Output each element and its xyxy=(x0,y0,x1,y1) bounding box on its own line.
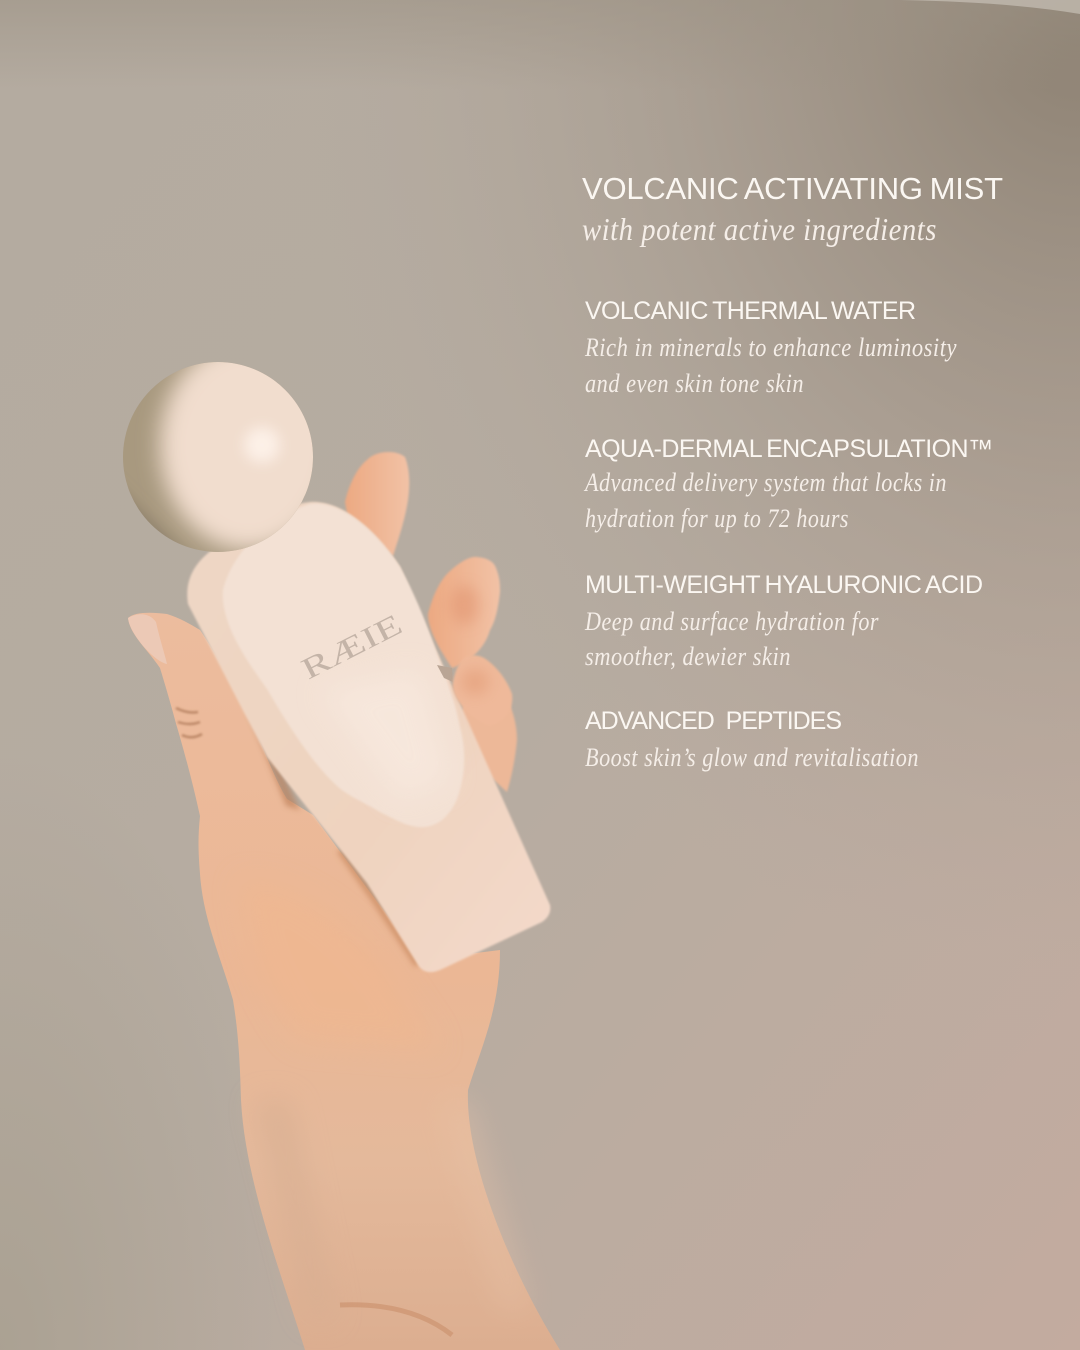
ingredient: volcanic thermal water: VOLCANIC THERMAL WATER xyxy=(585,297,916,325)
ingredient: multi-weight hyaluronic acid xyxy=(584,571,983,671)
ring finger tip xyxy=(453,655,512,726)
bottle neck xyxy=(216,503,306,550)
palm fold under bottle xyxy=(340,850,418,965)
palm glow xyxy=(240,880,440,1050)
bottle outer body xyxy=(187,502,550,972)
thumb crease xyxy=(176,708,202,737)
ingredient: volcanic thermal water xyxy=(584,297,957,398)
ingredient: volcanic thermal water: Rich in minerals to enhance luminosity xyxy=(584,333,957,362)
bottle front panel xyxy=(223,504,464,827)
title: with potent active ingredients xyxy=(582,211,937,247)
ingredient: multi-weight hyaluronic acid: smoother, dewier skin xyxy=(585,642,791,671)
ingredient: multi-weight hyaluronic acid: Deep and surface hydration for xyxy=(584,607,879,636)
thumb fold shadow xyxy=(248,712,300,810)
middle finger xyxy=(428,557,500,668)
ingredient: advanced peptides xyxy=(585,707,919,772)
title xyxy=(582,171,1003,247)
ingredient: advanced peptides: ADVANCED PEPTIDES xyxy=(585,707,842,735)
bottle logo: RÆIE xyxy=(296,608,407,686)
wrist shade xyxy=(255,1100,335,1320)
ingredient: aqua-dermal encapsulation: Advanced delivery system that locks in xyxy=(583,468,947,497)
ingredient: aqua-dermal encapsulation: hydration for up to 72 hours xyxy=(585,504,849,533)
ingredient: advanced peptides: Boost skin’s glow and revitalisation xyxy=(585,743,919,772)
wrist light streak xyxy=(340,1305,452,1335)
middle finger flush xyxy=(451,585,479,625)
bottle sphere cap xyxy=(123,362,313,552)
finger dent on bottle xyxy=(437,665,453,682)
ingredient: aqua-dermal encapsulation xyxy=(583,435,993,533)
panel soft glow xyxy=(320,670,450,800)
arm, palm and thumb xyxy=(128,613,560,1350)
thumb nail xyxy=(128,614,167,664)
ingredient: aqua-dermal encapsulation: AQUA-DERMAL ENCAPSULATION™ xyxy=(585,435,993,463)
hand holding bottle xyxy=(128,452,560,1350)
title: VOLCANIC ACTIVATING MIST xyxy=(582,171,1003,206)
ingredient: volcanic thermal water: and even skin tone skin xyxy=(585,369,804,398)
wrist haze xyxy=(440,1100,530,1310)
index finger xyxy=(345,452,409,556)
bottle xyxy=(110,340,550,972)
ingredient: multi-weight hyaluronic acid: MULTI-WEIGHT HYALURONIC ACID xyxy=(585,571,983,599)
ring finger lower part xyxy=(450,670,517,792)
